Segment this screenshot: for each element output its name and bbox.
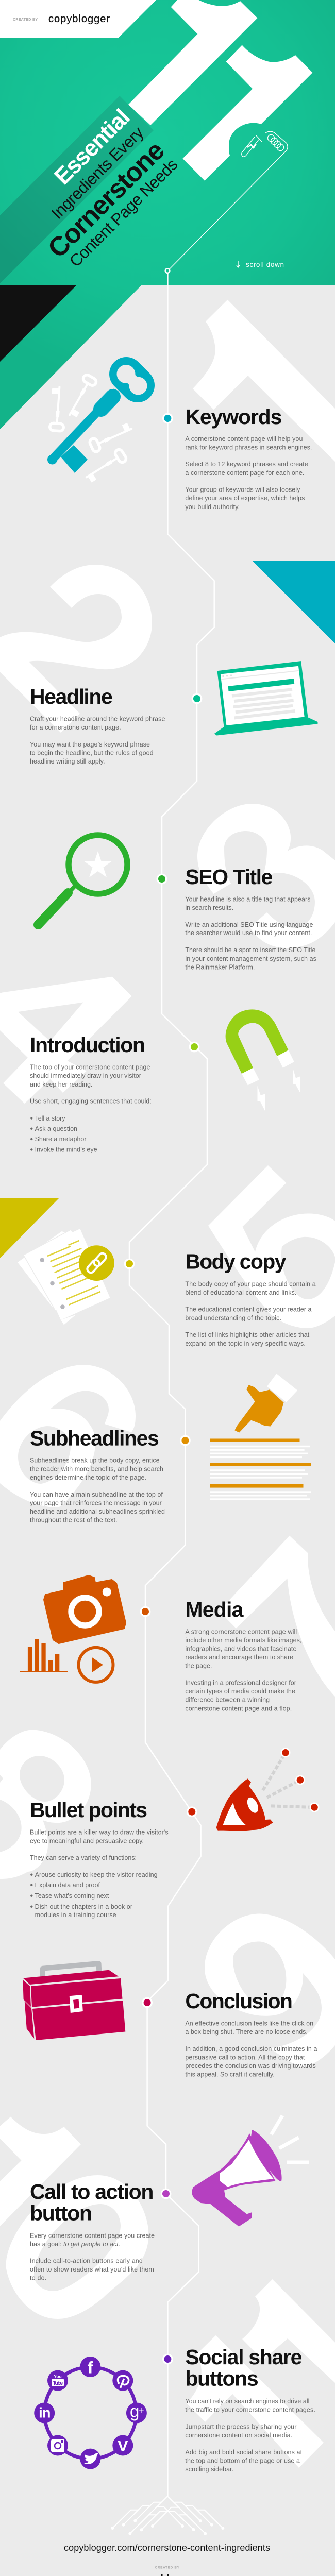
panel: hero xyxy=(0,0,335,429)
google plus: g xyxy=(130,2402,139,2420)
copyblogger logo: copyblogger xyxy=(48,13,110,25)
body text: rank for keyword phrases in search engines. xyxy=(185,444,312,451)
numeral 7 xyxy=(219,1536,335,1697)
numeral 2 xyxy=(0,565,152,733)
google plus xyxy=(130,2402,144,2420)
body text: broad understanding of the topic. xyxy=(185,1314,281,1321)
numeral 11, second digit xyxy=(187,2335,324,2468)
numeral 6 xyxy=(0,1365,136,1507)
body text: Bullet points are a killer way to draw the visitor's xyxy=(30,1829,169,1836)
numeral 10, digit 1 xyxy=(0,2117,81,2226)
timeline line xyxy=(129,273,214,2496)
body text: cornerstone content on social media. xyxy=(185,2432,292,2439)
body text: to begin the headline, but the rules of good xyxy=(30,749,154,756)
icon: megaphone xyxy=(192,2115,309,2227)
body text: Add big and bold social share buttons at xyxy=(185,2449,303,2456)
body text xyxy=(185,1628,301,1712)
node xyxy=(180,1435,191,1446)
body text: The list of links highlights other articles that xyxy=(185,1331,310,1338)
node xyxy=(157,874,167,884)
body text: persuasive call to action. All the copy that xyxy=(185,2054,305,2061)
body text: Invoke the mind’s eye xyxy=(35,1146,97,1154)
body text: the Rainmaker Platform. xyxy=(185,963,255,971)
node xyxy=(192,693,202,704)
body text: certain types of media could make the xyxy=(185,1688,295,1695)
body text: An effective conclusion feels like the click on xyxy=(185,2020,313,2027)
created by label: CREATED BY xyxy=(13,18,38,22)
body text: They can serve a variety of functions: xyxy=(30,1854,137,1861)
heading: button xyxy=(30,2201,92,2225)
body text: and keep her reading. xyxy=(30,1081,92,1088)
title line: Content Page Needs: Content Page Needs xyxy=(65,155,181,270)
panel: media xyxy=(20,1575,301,1712)
panel: seo title xyxy=(38,835,316,971)
body text: In addition, a good conclusion culminates in a xyxy=(185,2045,317,2053)
numeral 5 xyxy=(208,1165,335,1328)
node xyxy=(162,2354,173,2364)
instagram xyxy=(51,2439,64,2452)
body text: Arouse curiosity to keep the visitor reading xyxy=(35,1871,158,1878)
body text: precedes the conclusion was driving towards xyxy=(185,2062,316,2070)
heading: Bullet points xyxy=(30,1798,147,1822)
body text: define your area of expertise, which helps xyxy=(185,495,305,502)
numeral 8 xyxy=(0,1730,91,1879)
panel: introduction xyxy=(30,1009,300,1154)
body text xyxy=(185,895,316,971)
numeral 4 xyxy=(0,977,132,1104)
icon: social ring xyxy=(34,2357,147,2469)
heading: Conclusion xyxy=(185,1989,293,2013)
body text: Dish out the chapters in a book or xyxy=(35,1903,132,1910)
google plus: + xyxy=(138,2405,144,2417)
body text: Every cornerstone content page you create xyxy=(30,2232,155,2239)
title band xyxy=(0,96,154,283)
heading: Media xyxy=(185,1598,244,1621)
body text: has a goal: to get people to act. xyxy=(30,2241,120,2248)
icon: magnifying glass xyxy=(38,835,127,925)
body text: Include call-to-action buttons early and xyxy=(30,2258,143,2265)
body text: cornerstone content page and a flop. xyxy=(185,1705,292,1712)
created by label: CREATED BY xyxy=(155,2566,180,2570)
body text: Use short, engaging sentences that could: xyxy=(30,1098,152,1105)
corner triangle: yellow xyxy=(0,1198,59,1258)
title line: Cornerstone: Cornerstone xyxy=(42,135,171,264)
body text xyxy=(185,1280,316,1347)
body text: often to show readers what you’d like them xyxy=(30,2266,154,2273)
vine: V xyxy=(118,2437,128,2455)
body text xyxy=(185,2398,315,2473)
scroll down label: scroll down xyxy=(246,261,284,268)
white logo banner xyxy=(0,0,156,38)
body text: should immediately draw in your visitor — xyxy=(30,1072,149,1079)
body text: modules in a training course xyxy=(35,1911,116,1919)
numeral 3 xyxy=(197,804,335,948)
icon: camera xyxy=(44,1575,126,1643)
panel: bullet points xyxy=(30,1748,320,1919)
body text: readers and encourage them to share xyxy=(185,1654,293,1661)
body text: You can't rely on search engines to drive all xyxy=(185,2398,309,2405)
corner triangle: cyan xyxy=(253,561,335,643)
icon: white keys xyxy=(49,379,133,483)
icon: pointing hand xyxy=(235,1375,296,1432)
twitter xyxy=(84,2453,98,2464)
body text: in search results. xyxy=(185,904,233,911)
numeral 1 xyxy=(193,300,335,462)
body text: you build authority. xyxy=(185,503,240,511)
node xyxy=(187,1806,197,1817)
icon: page with subheads xyxy=(210,1438,311,1500)
large numeral one, left xyxy=(128,0,258,125)
heading: Call to action xyxy=(30,2180,154,2204)
body text: You may want the page’s keyword phrase xyxy=(30,741,150,748)
body text: Tease what’s coming next xyxy=(35,1892,109,1900)
black diagonal band xyxy=(0,285,77,362)
test tube and wire xyxy=(170,131,288,269)
body text: the page. xyxy=(185,1663,212,1670)
source url: copyblogger.com/cornerstone-content-ingredients xyxy=(64,2543,270,2553)
pinterest xyxy=(118,2376,129,2388)
body text: blend of educational content and links. xyxy=(185,1289,296,1296)
panel: conclusion xyxy=(23,1963,317,2078)
body text: the reader with more benefits, and help search xyxy=(30,1465,163,1472)
body text: the traffic to your cornerstone content pages. xyxy=(185,2406,315,2413)
node xyxy=(124,1259,135,1269)
panel: headline xyxy=(30,662,317,765)
scroll down icon xyxy=(237,261,240,267)
heading: Subheadlines xyxy=(30,1426,159,1450)
youtube: You xyxy=(54,2374,62,2379)
body text: Share a metaphor xyxy=(35,1136,87,1143)
numeral 10, digit 0 xyxy=(6,2175,148,2319)
body text: Tell a story xyxy=(35,1115,65,1122)
body text xyxy=(185,435,312,511)
body text: throughout the rest of the text. xyxy=(30,1517,118,1524)
body text: The body copy of your page should contain a xyxy=(185,1280,316,1287)
body text xyxy=(30,1829,169,1919)
node xyxy=(140,1606,150,1617)
panel: subheadlines xyxy=(30,1375,311,1524)
icon: toolbox xyxy=(23,1963,125,2040)
node xyxy=(189,1042,199,1052)
heading: Keywords xyxy=(185,405,282,429)
heading: Introduction xyxy=(30,1033,145,1057)
body text: Your headline is also a title tag that appears xyxy=(185,895,310,903)
body text xyxy=(30,1457,165,1524)
title xyxy=(42,104,181,270)
heading: SEO Title xyxy=(185,865,273,889)
body text: headline and additional subheadlines sprinkled xyxy=(30,1508,165,1515)
panel: call to action xyxy=(30,2115,309,2282)
heading: buttons xyxy=(185,2367,259,2391)
body text: Subheadlines break up the body copy, entice xyxy=(30,1457,160,1464)
body text: a box being shut. There are no loose ends. xyxy=(185,2028,308,2036)
title line: Ingredients Every: Ingredients Every xyxy=(47,123,147,223)
body text: the top and bottom of the page or use a xyxy=(185,2457,300,2464)
body text: Jumpstart the process by sharing your xyxy=(185,2423,296,2430)
node xyxy=(161,2189,171,2199)
body text: expand on the topic in very specific ways. xyxy=(185,1340,306,1347)
footer xyxy=(64,2543,270,2576)
facebook: f xyxy=(88,2359,93,2377)
heading: Body copy xyxy=(185,1250,287,1274)
body text: Craft your headline around the keyword phrase xyxy=(30,715,165,722)
body text: You can have a main subheadline at the top of xyxy=(30,1491,163,1498)
body text: difference between a winning xyxy=(185,1697,270,1704)
hero green background xyxy=(0,0,335,429)
body text xyxy=(30,2232,155,2282)
body text: There should be a spot to insert the SEO Title xyxy=(185,946,315,954)
body text: Explain data and proof xyxy=(35,1882,100,1889)
large numeral one, right xyxy=(182,45,312,181)
icon: play button xyxy=(78,1648,113,1682)
numeral 9 xyxy=(205,1913,335,2067)
body text: The top of your cornerstone content page xyxy=(30,1064,150,1071)
body text: headline writing still apply. xyxy=(30,758,105,765)
body text: scrolling sidebar. xyxy=(185,2466,233,2473)
node xyxy=(142,1997,153,2008)
icon: bar chart xyxy=(20,1639,68,1672)
body text: Investing in a professional designer for xyxy=(185,1680,296,1687)
title line: Essential: Essential xyxy=(49,104,135,190)
heading xyxy=(30,2180,154,2225)
body text: A cornerstone content page will help you xyxy=(185,435,303,443)
icon: eye with dotted sightlines xyxy=(216,1748,320,1831)
numeral 11, first digit xyxy=(242,2279,335,2383)
timeline start node xyxy=(165,268,170,273)
body text: engines determine the topic of the page. xyxy=(30,1474,146,1481)
youtube xyxy=(52,2374,64,2386)
heading: Headline xyxy=(30,685,113,708)
body text: The educational content gives your reader a xyxy=(185,1306,311,1313)
icon: magnet xyxy=(226,1009,300,1111)
body text xyxy=(185,2020,317,2078)
body text: this appeal. So craft it carefully. xyxy=(185,2071,275,2078)
linkedin: in xyxy=(39,2405,51,2421)
node xyxy=(162,413,173,423)
body text: Select 8 to 12 keyword phrases and create xyxy=(185,461,308,468)
body text: a cornerstone content page for each one. xyxy=(185,469,304,477)
youtube: Tube xyxy=(53,2380,63,2386)
body text: Your group of keywords will also loosely xyxy=(185,486,300,494)
heading: Social share xyxy=(185,2345,302,2369)
body text: Write an additional SEO Title using language xyxy=(185,921,313,928)
body text: to do. xyxy=(30,2275,46,2282)
body text xyxy=(30,715,165,765)
body text: eye to meaningful and persuasive copy. xyxy=(30,1837,144,1844)
body text: your page that reinforces the message in your xyxy=(30,1499,162,1506)
body text xyxy=(30,1064,152,1154)
heading xyxy=(185,2345,302,2391)
body text: A strong cornerstone content page will xyxy=(185,1628,297,1635)
timeline roots xyxy=(111,2496,224,2535)
body text: infographics, and videos that fascinate xyxy=(185,1646,296,1653)
body text: the searcher would use to find your content. xyxy=(185,929,312,937)
panel: keywords xyxy=(47,365,312,511)
body text: for a cornerstone content page. xyxy=(30,724,121,731)
panel: social share buttons xyxy=(34,2345,315,2473)
body text: include other media formats like images, xyxy=(185,1637,301,1644)
icon: documents with link xyxy=(17,1229,114,1325)
icon: laptop xyxy=(215,662,317,735)
body text: Ask a question xyxy=(35,1125,77,1132)
icon: large key xyxy=(47,365,147,473)
body text: in your content management system, such as xyxy=(185,955,316,962)
panel: body copy xyxy=(17,1229,316,1347)
